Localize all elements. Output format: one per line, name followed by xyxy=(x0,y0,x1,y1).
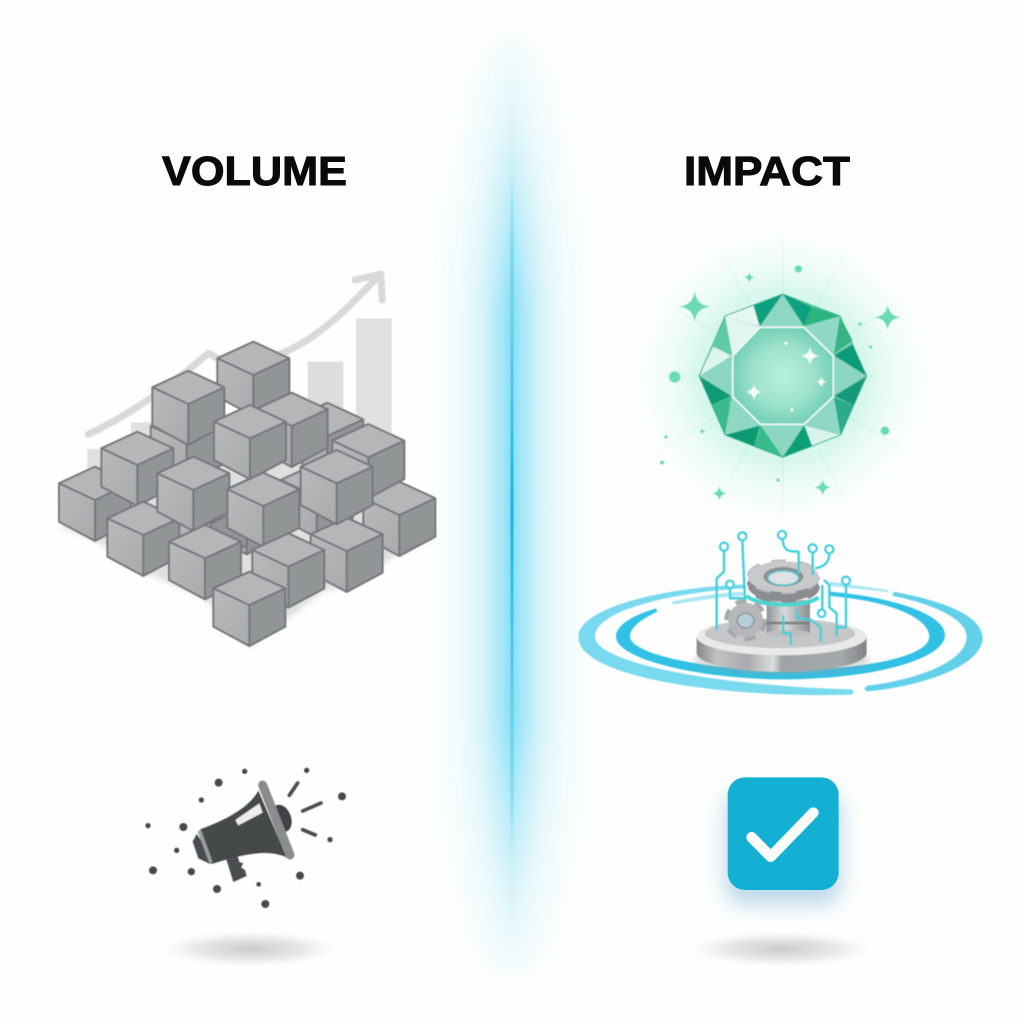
dots xyxy=(145,768,346,908)
heading: IMPACT: IMPACT xyxy=(684,148,850,194)
outer ring pieces xyxy=(578,582,983,695)
gear column xyxy=(767,600,810,637)
heading: VOLUME: VOLUME xyxy=(162,148,347,194)
gem glow xyxy=(626,219,939,533)
growth arrow xyxy=(88,274,382,434)
inner ring xyxy=(616,592,945,679)
gem body xyxy=(699,294,867,457)
icon: megaphone with scattered dots xyxy=(145,768,346,967)
sound lines xyxy=(289,783,321,835)
check mark xyxy=(752,813,813,857)
outer green sparkles and dots xyxy=(660,265,901,501)
tile shadow xyxy=(725,792,842,905)
large gear xyxy=(747,561,819,605)
inner white sparkles xyxy=(745,340,827,413)
megaphone xyxy=(193,785,295,882)
illustration: gears on platform with rings xyxy=(578,531,983,695)
ground shadow left xyxy=(160,931,340,967)
central divider glow xyxy=(452,46,572,968)
small gear xyxy=(728,603,763,637)
bar chart behind cubes xyxy=(87,318,392,479)
icon: check mark tile xyxy=(688,777,875,967)
ground shadow right xyxy=(688,931,875,967)
illustration: cube pile with growth chart xyxy=(59,274,437,648)
cubes xyxy=(59,342,435,646)
platform xyxy=(693,618,870,675)
light rays xyxy=(627,220,938,530)
tile xyxy=(728,777,839,890)
circuit traces xyxy=(717,531,850,645)
pile ground shadow xyxy=(60,437,437,648)
illustration: emerald gem xyxy=(626,219,939,533)
